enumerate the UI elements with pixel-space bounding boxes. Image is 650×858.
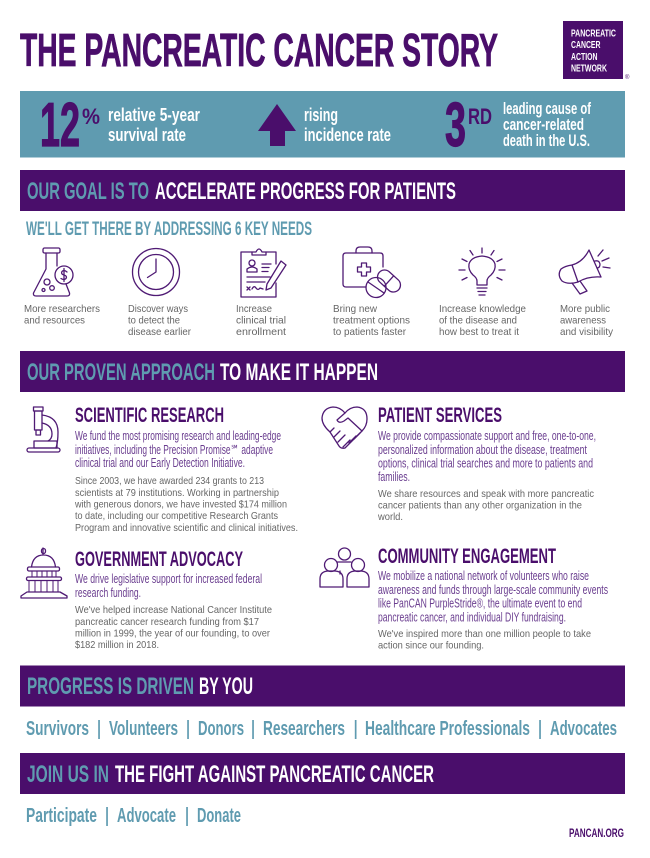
- panel: scientific research: Since 2003, we have awarded 234 grants to 213: [75, 475, 264, 487]
- icon: microscope: [27, 407, 60, 452]
- icon: up arrow with rising incidence rate: incidence rate: [304, 125, 391, 145]
- banner: join us: [20, 753, 625, 794]
- need: knowledge: [439, 248, 526, 338]
- icon: capitol building: [21, 548, 67, 598]
- panel: patient services: PATIENT SERVICES: [378, 404, 502, 427]
- banner: proven approach: [20, 351, 625, 392]
- list: calls to action: |: [184, 804, 190, 827]
- need: awareness: and visibility: [560, 326, 614, 338]
- banner: progress is driven: BY YOU: [199, 673, 253, 700]
- panel: community engagement: pancreatic cancer, and individual DIY fundraising.: [378, 610, 566, 624]
- stat: 3rd leading cause: death in the U.S.: [503, 132, 590, 150]
- list: who drives progress: |: [537, 717, 543, 740]
- banner: progress is driven: PROGRESS IS DRIVEN: [27, 673, 194, 700]
- subheading: six key needs: WE'LL GET THERE BY ADDRESSING 6 KEY NEEDS: [26, 219, 312, 240]
- panel: community engagement: action since our founding.: [378, 640, 484, 652]
- list: who drives progress: Donors: [198, 717, 244, 740]
- website url: PANCAN.ORG: [569, 828, 624, 840]
- list: who drives progress: |: [250, 717, 256, 740]
- logo: ACTION: [571, 51, 598, 63]
- stat: 12 percent: 12: [40, 91, 80, 160]
- panel: community engagement: We've inspired more than one million people to take: [378, 628, 591, 640]
- need: detect earlier: disease earlier: [128, 326, 191, 338]
- list: who drives progress: |: [185, 717, 191, 740]
- panel: scientific research: SCIENTIFIC RESEARCH: [75, 404, 224, 427]
- need: researchers and resources: [24, 248, 100, 326]
- stat: 3rd leading cause: leading cause of: [503, 100, 591, 118]
- stat: 3rd leading cause: RD: [468, 104, 492, 129]
- need: awareness: [559, 250, 614, 338]
- panel: patient services: world.: [377, 511, 403, 523]
- panel: government advocacy: We've helped increase National Cancer Institute: [75, 604, 272, 616]
- need: clinical trial enrollment: clinical trial: [236, 314, 286, 326]
- logo: NETWORK: [571, 62, 607, 74]
- need: awareness: More public: [560, 303, 610, 315]
- stat: 3rd leading cause: [445, 91, 591, 160]
- need: clinical trial enrollment: Increase: [236, 303, 272, 315]
- stat: 12 percent: relative 5-year: [108, 105, 200, 125]
- banner: join us: JOIN US IN: [27, 761, 109, 788]
- banner: proven approach: OUR PROVEN APPROACH: [27, 359, 215, 386]
- panel: scientific research: scientists at 79 institutions. Working in partnership: [75, 487, 279, 499]
- icon: clock: [132, 248, 180, 296]
- logo: [563, 21, 630, 81]
- banner: proven approach: TO MAKE IT HAPPEN: [220, 359, 378, 386]
- icon: megaphone: [559, 250, 610, 294]
- need: awareness: awareness: [560, 314, 606, 326]
- need: new treatments: treatment options: [333, 314, 410, 326]
- need: detect earlier: [128, 248, 191, 338]
- logo: PANCREATIC: [571, 28, 616, 40]
- panel: scientific research: to date, including our competitive Research Grants: [75, 510, 278, 522]
- list: who drives progress: |: [353, 717, 358, 740]
- panel: community engagement: [320, 545, 608, 652]
- need: new treatments: [333, 247, 410, 338]
- list: who drives progress: Healthcare Professionals: [365, 717, 530, 740]
- stat: 12 percent: %: [82, 104, 100, 129]
- icon: up arrow with rising incidence rate: rising: [304, 105, 338, 125]
- need: researchers and resources: and resources: [24, 314, 85, 326]
- panel: government advocacy: research funding.: [75, 586, 141, 600]
- list: who drives progress: [26, 717, 617, 740]
- panel: government advocacy: pancreatic cancer research funding from $17: [75, 616, 259, 628]
- panel: government advocacy: GOVERNMENT ADVOCACY: [75, 548, 243, 571]
- panel: scientific research: with generous donors, we have invested $174 million: [74, 498, 287, 510]
- need: detect earlier: to detect the: [128, 314, 180, 326]
- panel: scientific research: initiatives, including the Precision Promise℠ adaptive: [75, 443, 273, 457]
- list: calls to action: Donate: [197, 804, 241, 827]
- list: calls to action: |: [104, 804, 110, 827]
- need: researchers and resources: More researchers: [24, 303, 100, 315]
- panel: patient services: We share resources and speak with more pancreatic: [378, 488, 594, 500]
- banner: our goal: ACCELERATE PROGRESS FOR PATIENTS: [155, 178, 456, 205]
- stat: 3rd leading cause: 3: [445, 91, 466, 160]
- need: knowledge: Increase knowledge: [439, 303, 526, 315]
- stat: 12 percent: survival rate: [108, 125, 186, 145]
- stat: 3rd leading cause: cancer-related: [503, 116, 584, 134]
- logo: ®: [625, 74, 630, 81]
- banner: progress is driven: [20, 666, 625, 706]
- panel: scientific research: clinical trial and our Early Detection Initiative.: [75, 456, 245, 470]
- panel: scientific research: [27, 404, 298, 534]
- panel: patient services: [322, 404, 596, 523]
- panel: government advocacy: million in 1999, the year of our founding, to over: [75, 628, 270, 640]
- list: who drives progress: Researchers: [263, 717, 345, 740]
- icon: clipboard with pencil: [241, 249, 286, 297]
- icon: light bulb: [459, 248, 505, 295]
- panel: scientific research: Program and innovative scientific and clinical initiatives.: [75, 522, 298, 534]
- panel: patient services: cancer patients than any other organization in the: [378, 500, 582, 512]
- icon: flask with dollar: [33, 248, 73, 296]
- banner: join us: THE FIGHT AGAINST PANCREATIC CANCER: [115, 761, 434, 788]
- need: detect earlier: Discover ways: [128, 303, 188, 315]
- panel: government advocacy: [21, 548, 272, 651]
- stat: 12 percent: [40, 91, 200, 160]
- list: calls to action: Participate: [26, 804, 97, 827]
- list: calls to action: Advocate: [117, 804, 176, 827]
- list: calls to action: [26, 804, 241, 827]
- icon: medical kit with pills: [343, 247, 403, 298]
- panel: scientific research: We fund the most promising research and leading-edge: [75, 429, 281, 443]
- list: who drives progress: Volunteers: [109, 717, 178, 740]
- logo: CANCER: [571, 39, 601, 51]
- banner: our goal: [20, 170, 625, 211]
- panel: patient services: families.: [378, 470, 410, 484]
- icon: up arrow with rising incidence rate: [258, 104, 391, 146]
- need: new treatments: to patients faster: [333, 326, 406, 338]
- need: clinical trial enrollment: enrollment: [236, 326, 286, 338]
- need: clinical trial enrollment: [236, 249, 286, 338]
- panel: government advocacy: $182 million in 2018.: [75, 639, 159, 651]
- need: knowledge: of the disease and: [439, 314, 517, 326]
- need: new treatments: Bring new: [333, 303, 377, 315]
- panel: government advocacy: We drive legislative support for increased federal: [75, 572, 262, 586]
- icon: handshake heart: [322, 407, 367, 448]
- icon: three people: [320, 548, 369, 587]
- list: who drives progress: Survivors: [26, 717, 89, 740]
- list: who drives progress: |: [96, 717, 102, 740]
- stats band: [20, 91, 625, 160]
- banner: our goal: OUR GOAL IS TO: [27, 178, 149, 205]
- need: knowledge: how best to treat it: [439, 326, 519, 338]
